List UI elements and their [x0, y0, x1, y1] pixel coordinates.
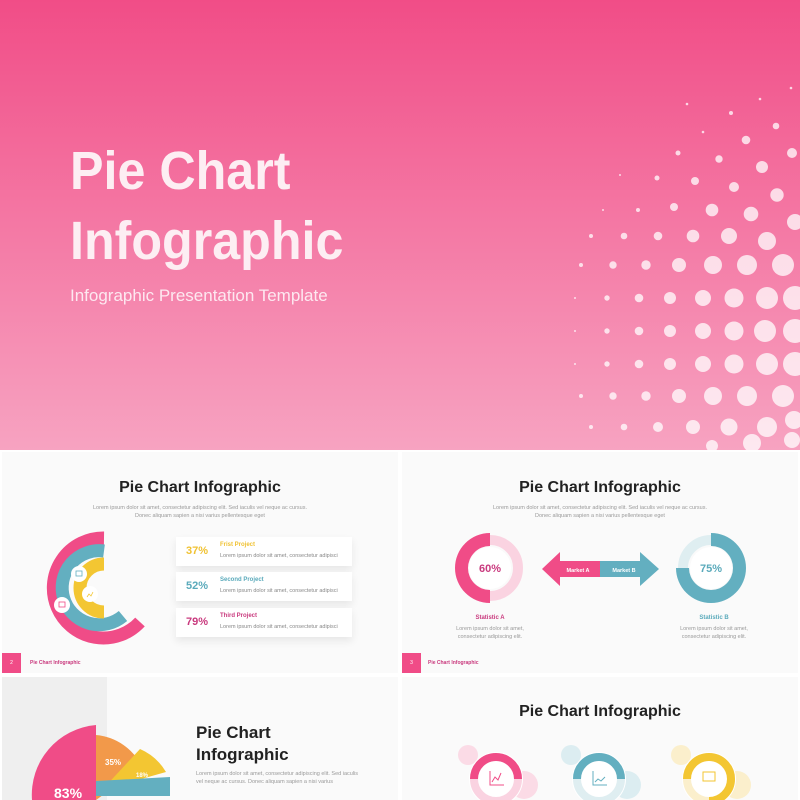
- footer: page 3: [402, 653, 479, 673]
- card: first project: 37%: [186, 545, 208, 557]
- donut: statistic B: 75%: [700, 563, 722, 575]
- label: statistic A: Statistic A: [475, 615, 505, 621]
- hero title: Infographic: [70, 211, 343, 271]
- card: second project: 52%: [186, 580, 208, 592]
- slide 5 title: Pie Chart Infographic: [519, 703, 681, 720]
- footer: page 2: 2: [10, 660, 13, 666]
- slide 3 text: Donec aliquam sapien a nisi varius pellentesque eget: [535, 513, 665, 519]
- card: second project: Second Project: [220, 577, 264, 583]
- panel: slide 2: [2, 452, 398, 673]
- slide 4 title: [196, 723, 289, 764]
- hero title: Pie Chart: [70, 141, 290, 201]
- slide 2 title: Pie Chart Infographic: [119, 479, 281, 496]
- chart: concentric arcs: [46, 532, 145, 644]
- card: first project: Frist Project: [220, 542, 255, 548]
- card: third project: Third Project: [220, 613, 257, 619]
- label: statistic B: Statistic B: [699, 615, 729, 621]
- footer: page 2: [2, 653, 81, 673]
- card: second project: [176, 572, 352, 601]
- slide 4 text: vel neque ac cursus. Donec aliquam sapien a nisi varius: [196, 779, 333, 785]
- card: third project: 79%: [186, 616, 208, 628]
- panel: slide 3: [402, 452, 798, 673]
- footer: page 2: Pie Chart Infographic: [30, 660, 81, 666]
- card: second project: Lorem ipsum dolor sit amet, consectetur adipisci: [220, 588, 338, 594]
- slide 3 text: [493, 505, 707, 519]
- hero banner: [0, 0, 800, 450]
- card: first project: Lorem ipsum dolor sit amet, consectetur adipisci: [220, 553, 338, 559]
- slide 4 title: Infographic: [196, 745, 289, 764]
- hero title: [70, 141, 343, 271]
- donut: statistic A: [455, 533, 523, 603]
- donut icons row: [458, 745, 751, 800]
- arrow: market A / B: [542, 552, 659, 586]
- slide 2 text: Lorem ipsum dolor sit amet, consectetur adipiscing elit. Sed iaculis vel neque ac cursus.: [93, 505, 307, 511]
- card: third project: Lorem ipsum dolor sit amet, consectetur adipisci: [220, 624, 338, 630]
- slide 2 text: [93, 505, 307, 519]
- hero subtitle: Infographic Presentation Template: [70, 286, 328, 305]
- label: statistic B: [680, 614, 748, 640]
- arrow: market A / B: Market A: [566, 568, 590, 574]
- panel: slide 4: [2, 677, 398, 800]
- label: statistic B: Lorem ipsum dolor sit amet,: [680, 626, 748, 632]
- panel: slide 5: [402, 677, 798, 800]
- footer: page 3: 3: [410, 660, 413, 666]
- footer: page 3: Pie Chart Infographic: [428, 660, 479, 666]
- slide 3 title: Pie Chart Infographic: [519, 479, 681, 496]
- card: first project: [176, 537, 352, 566]
- slide 4 text: [196, 771, 358, 785]
- slide 4 title: Pie Chart: [196, 723, 271, 742]
- label: statistic B: consectetur adipiscing elit.: [682, 634, 746, 640]
- label: statistic A: [456, 614, 524, 640]
- arrow: market A / B: Market B: [612, 568, 636, 574]
- label: statistic A: consectetur adipiscing elit.: [458, 634, 522, 640]
- slide 4 text: Lorem ipsum dolor sit amet, consectetur adipiscing elit. Sed iaculis: [196, 771, 358, 777]
- hero dots pattern: [574, 86, 800, 450]
- pie chart: 35%: [105, 758, 121, 767]
- pie chart: [32, 725, 170, 800]
- pie chart: 18%: [136, 773, 149, 779]
- slide 2 text: Donec aliquam sapien a nisi varius pellentesque eget: [135, 513, 265, 519]
- donut: statistic B: [676, 533, 746, 603]
- label: statistic A: Lorem ipsum dolor sit amet,: [456, 626, 524, 632]
- slide 3 text: Lorem ipsum dolor sit amet, consectetur adipiscing elit. Sed iaculis vel neque ac cursus.: [493, 505, 707, 511]
- card: third project: [176, 608, 352, 637]
- donut: statistic A: 60%: [479, 563, 501, 575]
